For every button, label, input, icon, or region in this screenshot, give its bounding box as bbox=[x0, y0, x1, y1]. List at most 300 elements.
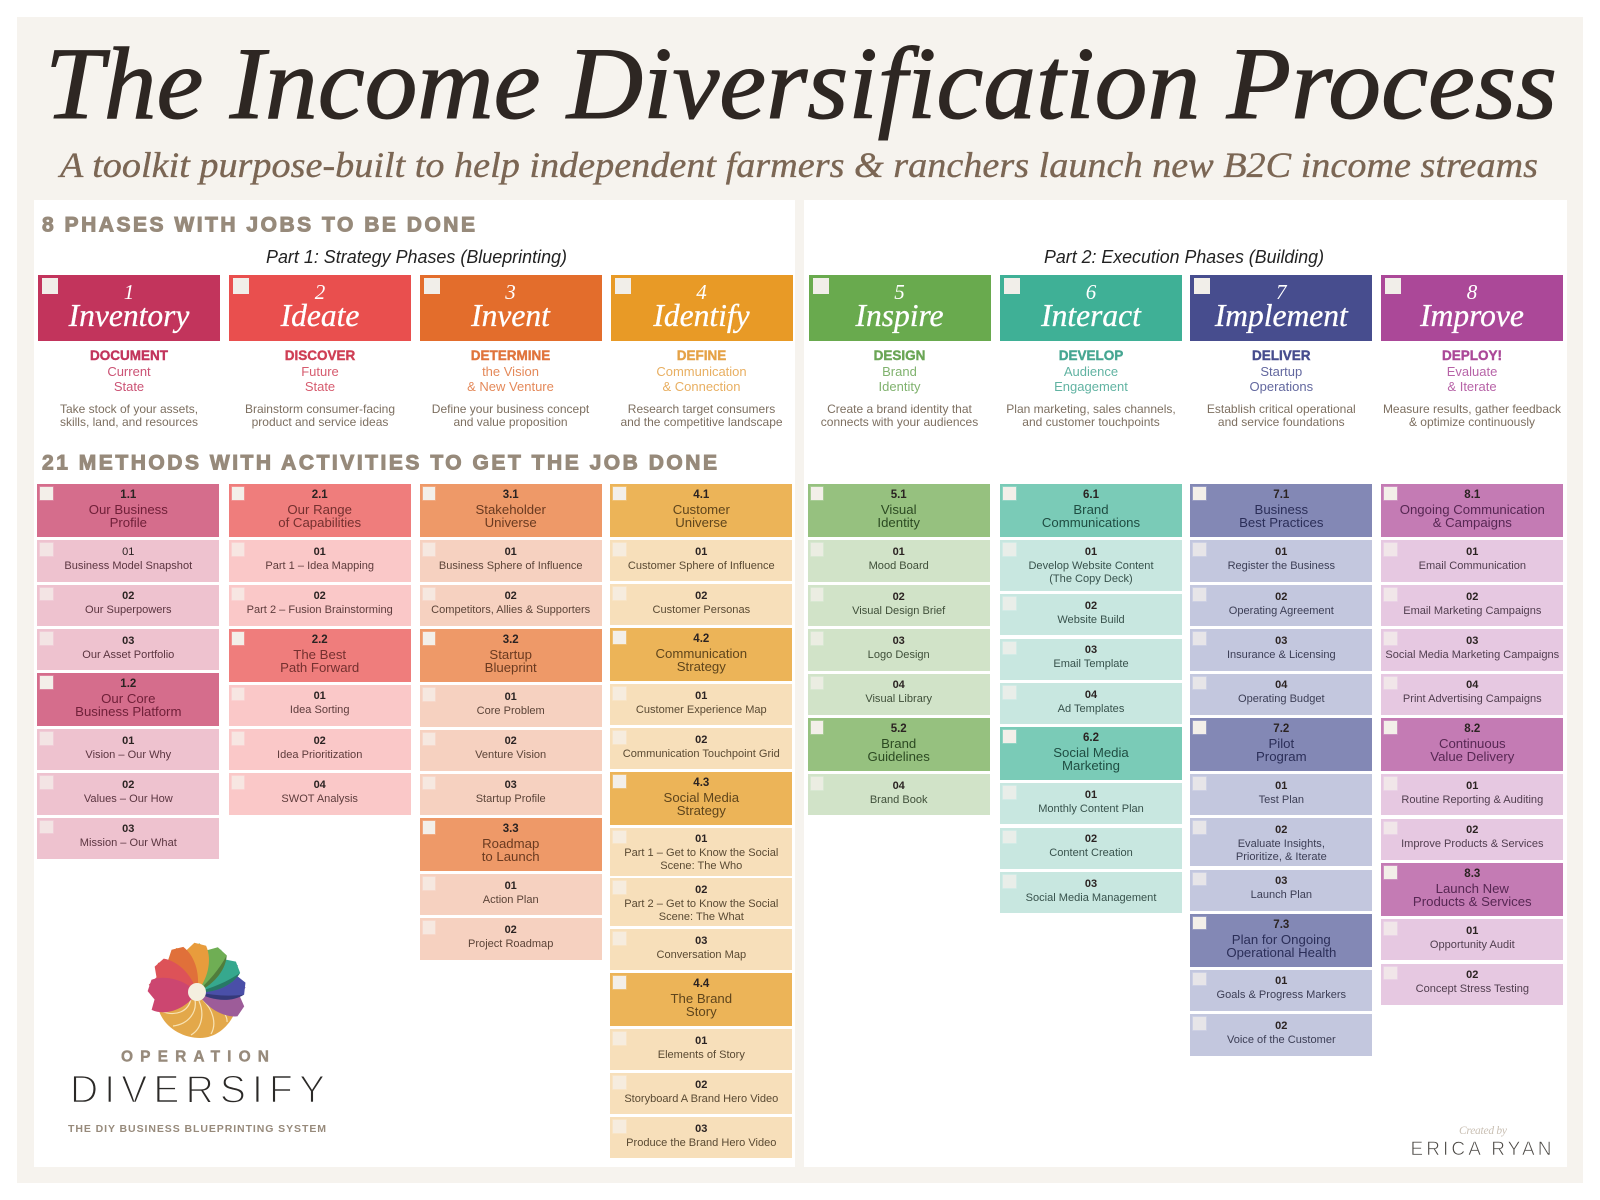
activity 4.2-02 bbox=[610, 728, 792, 769]
activity 4.2-02: Communication Touchpoint Grid bbox=[623, 748, 780, 760]
activity 7.2-01 bbox=[1190, 774, 1372, 815]
phase 5 job subtitle: Brand bbox=[882, 364, 917, 379]
activity 8.3-02: Concept Stress Testing bbox=[1416, 983, 1529, 995]
method 1.2: Business Platform bbox=[75, 704, 181, 719]
activity 7.1-01: Register the Business bbox=[1228, 560, 1335, 572]
activity 6.1-04: Ad Templates bbox=[1058, 702, 1124, 714]
activity 2.2-02: Idea Prioritization bbox=[277, 748, 362, 760]
activity 1.2-02 bbox=[37, 773, 219, 815]
activity 4.4-01: 01 bbox=[695, 1034, 707, 1046]
method 6.2: Marketing bbox=[1062, 758, 1120, 773]
activity 1.2-02: Values – Our How bbox=[84, 793, 173, 805]
activity 6.1-02 bbox=[1000, 594, 1182, 635]
phase 3 description bbox=[432, 402, 590, 428]
activity 5.1-02 bbox=[808, 585, 990, 626]
activity 2.1-02 bbox=[229, 585, 411, 626]
phase 2 description: product and service ideas bbox=[252, 414, 388, 428]
activity 7.1-04: 04 bbox=[1275, 679, 1287, 691]
phase 6 banner bbox=[1000, 275, 1182, 341]
subtitle: A toolkit purpose-built to help independent farmers & ranchers launch new B2C income streams bbox=[58, 145, 1538, 185]
phase 1 description bbox=[60, 402, 198, 428]
phase 7 banner: Implement bbox=[1215, 298, 1348, 333]
method 1.1 bbox=[37, 484, 219, 537]
method 3.3: 3.3 bbox=[503, 823, 519, 835]
activity 4.3-01: Scene: The Who bbox=[660, 860, 742, 872]
method 2.1 bbox=[229, 484, 411, 537]
activity 8.2-01 bbox=[1381, 774, 1563, 815]
colour petals bbox=[145, 940, 249, 1018]
phase 1 job: DOCUMENT bbox=[90, 348, 168, 363]
activity 3.2-02 bbox=[420, 730, 602, 771]
methods column 6 bbox=[1000, 484, 1182, 913]
method 5.2: Brand bbox=[881, 736, 916, 751]
method 8.2: 8.2 bbox=[1464, 723, 1480, 735]
phase 1 banner: Inventory bbox=[69, 298, 189, 333]
activity 1.2-03: 03 bbox=[122, 823, 134, 835]
method 5.2: 5.2 bbox=[891, 723, 907, 735]
activity 7.2-02: Evaluate Insights, bbox=[1238, 838, 1325, 850]
activity 4.1-01 bbox=[610, 540, 792, 581]
method 2.1: of Capabilities bbox=[278, 515, 361, 530]
method 7.2: 7.2 bbox=[1273, 723, 1289, 735]
activity 1.2-03: Mission – Our What bbox=[80, 837, 177, 849]
method 3.2: 3.2 bbox=[503, 634, 519, 646]
credit: Erica Ryan: ERICA RYAN bbox=[1410, 1139, 1552, 1160]
phase 1 banner bbox=[38, 275, 220, 341]
phase 6 job subtitle: Audience bbox=[1064, 364, 1118, 379]
activity 7.3-02 bbox=[1190, 1014, 1372, 1056]
activity 2.2-01: 01 bbox=[314, 690, 326, 702]
method 4.1: Universe bbox=[675, 515, 727, 530]
method 1.1: 1.1 bbox=[120, 489, 136, 501]
activity 3.3-02: Project Roadmap bbox=[468, 938, 553, 950]
method 2.1: Our Range bbox=[287, 502, 352, 517]
phase 2 description: Brainstorm consumer-facing bbox=[245, 402, 395, 416]
method 8.3 bbox=[1381, 863, 1563, 916]
logo mark bbox=[145, 940, 249, 1038]
activity 3.3-01: Action Plan bbox=[483, 894, 539, 906]
activity 8.1-01: 01 bbox=[1466, 546, 1478, 558]
activity 4.3-01: Part 1 – Get to Know the Social bbox=[624, 847, 778, 859]
activity 3.2-03: 03 bbox=[505, 779, 517, 791]
phase 5 bbox=[809, 275, 991, 428]
phase 4 banner: 4 bbox=[696, 280, 707, 304]
phase 6 job subtitle: Engagement bbox=[1054, 379, 1128, 394]
method 3.1: 3.1 bbox=[503, 489, 519, 501]
activity 4.3-01: 01 bbox=[695, 833, 707, 845]
methods column 7 bbox=[1190, 484, 1372, 1056]
method 2.2 bbox=[229, 629, 411, 682]
activity 8.1-04 bbox=[1381, 674, 1563, 715]
method 8.3: 8.3 bbox=[1464, 868, 1480, 880]
heading: 21 methods: 21 METHODS WITH ACTIVITIES TO GET THE JOB DONE bbox=[42, 452, 717, 474]
activity 4.4-03: 03 bbox=[695, 1122, 707, 1134]
method 4.3: Strategy bbox=[677, 803, 726, 818]
method 6.2: Social Media bbox=[1053, 745, 1129, 760]
activity 5.2-04: 04 bbox=[893, 780, 905, 792]
phase 1 job subtitle: Current bbox=[107, 364, 151, 379]
activity 4.3-03: 03 bbox=[695, 934, 707, 946]
activity 4.4-02: Storyboard A Brand Hero Video bbox=[624, 1092, 778, 1104]
method 5.1: Identity bbox=[877, 515, 920, 530]
phase 7 bbox=[1190, 275, 1372, 428]
method 8.3: Launch New bbox=[1436, 881, 1509, 896]
activity 8.2-01: 01 bbox=[1466, 780, 1478, 792]
activity 8.1-02: Email Marketing Campaigns bbox=[1403, 604, 1541, 616]
phase 1 banner: 1 bbox=[124, 280, 134, 304]
activity 4.3-02: Scene: The What bbox=[659, 911, 744, 923]
activity 7.1-01: 01 bbox=[1275, 546, 1287, 558]
phase 1 job subtitle bbox=[107, 364, 151, 394]
activity 1.1-03: 03 bbox=[122, 634, 134, 646]
method 3.1: Stakeholder bbox=[475, 502, 546, 517]
phase 5 job: DESIGN bbox=[874, 348, 925, 363]
method 7.1: Best Practices bbox=[1239, 515, 1323, 530]
activity 4.1-01: Customer Sphere of Influence bbox=[628, 560, 775, 572]
method 5.1: Visual bbox=[881, 502, 917, 517]
activity 4.1-02: Customer Personas bbox=[652, 604, 750, 616]
phase 8 job subtitle: Evaluate bbox=[1447, 364, 1497, 379]
activity 8.2-01: Routine Reporting & Auditing bbox=[1401, 794, 1543, 806]
method 4.4: The Brand bbox=[670, 991, 732, 1006]
method 8.1 bbox=[1381, 484, 1563, 537]
activity 1.2-03 bbox=[37, 818, 219, 859]
phase 3 bbox=[420, 275, 602, 428]
phase 4 job subtitle bbox=[656, 364, 747, 394]
phase 2 job subtitle bbox=[301, 364, 339, 394]
method 4.4: Story bbox=[686, 1004, 717, 1019]
activity 2.2-04: SWOT Analysis bbox=[281, 793, 358, 805]
phase 8 description bbox=[1383, 402, 1561, 428]
panel: part 2 background bbox=[804, 200, 1567, 1167]
method 4.2: Strategy bbox=[677, 659, 726, 674]
phase 7 description bbox=[1207, 402, 1356, 428]
activity 8.2-02: 02 bbox=[1466, 824, 1478, 836]
phase 7 description: and service foundations bbox=[1218, 414, 1345, 428]
phase 4 job subtitle: & Connection bbox=[662, 379, 741, 394]
phase 8 job: DEPLOY! bbox=[1442, 348, 1502, 363]
activity 7.1-03: 03 bbox=[1275, 635, 1287, 647]
methods column 8 bbox=[1381, 484, 1563, 1005]
activity 6.1-04 bbox=[1000, 683, 1182, 724]
activity 7.1-04: Operating Budget bbox=[1238, 693, 1325, 705]
phase 8 job subtitle bbox=[1447, 364, 1497, 394]
phase 5 job subtitle bbox=[879, 364, 920, 394]
phase 5 banner: Inspire bbox=[855, 298, 944, 333]
method 2.1: 2.1 bbox=[312, 489, 328, 501]
method 6.2 bbox=[1000, 727, 1182, 780]
method 8.1: 8.1 bbox=[1464, 489, 1480, 501]
method 7.2: Pilot bbox=[1268, 736, 1294, 751]
activity 7.1-02 bbox=[1190, 585, 1372, 626]
method 4.4: 4.4 bbox=[693, 978, 709, 990]
phase 7 description: Establish critical operational bbox=[1207, 402, 1356, 416]
activity 7.1-02: 02 bbox=[1275, 590, 1287, 602]
panel: part 1 background bbox=[34, 200, 795, 1167]
activity 8.1-04: 04 bbox=[1466, 679, 1478, 691]
activity 6.1-01 bbox=[1000, 540, 1182, 591]
phase 6 description bbox=[1006, 402, 1176, 428]
method 3.2: Startup bbox=[489, 647, 532, 662]
activity 3.3-02 bbox=[420, 918, 602, 960]
phase 6 job: DEVELOP bbox=[1059, 348, 1123, 363]
phase 6 bbox=[1000, 275, 1182, 428]
activity 6.1-01: (The Copy Deck) bbox=[1049, 573, 1133, 585]
activity 3.1-02: Competitors, Allies & Supporters bbox=[431, 604, 590, 616]
activity 6.2-01: Monthly Content Plan bbox=[1038, 802, 1144, 814]
phase 8 banner: Improve bbox=[1420, 298, 1524, 333]
activity 4.3-01 bbox=[610, 828, 792, 876]
activity 4.4-01 bbox=[610, 1029, 792, 1070]
activity 3.2-01: 01 bbox=[505, 691, 517, 703]
activity 6.1-02: Website Build bbox=[1057, 614, 1125, 626]
phase 6 banner: Interact bbox=[1041, 298, 1141, 333]
method 4.2 bbox=[610, 628, 792, 681]
phase 5 description: connects with your audiences bbox=[821, 414, 978, 428]
method 5.2: Guidelines bbox=[868, 749, 930, 764]
method 7.1: Business bbox=[1255, 502, 1308, 517]
activity 6.1-02: 02 bbox=[1085, 600, 1097, 612]
method 7.3 bbox=[1190, 914, 1372, 967]
method 1.1: Profile bbox=[110, 515, 147, 530]
activity 2.1-01: 01 bbox=[314, 546, 326, 558]
activity 7.2-02: Prioritize, & Iterate bbox=[1236, 851, 1327, 863]
logo text: operation: OPERATION bbox=[121, 1048, 269, 1066]
phase 4 banner: Identify bbox=[653, 298, 750, 333]
method 4.2: 4.2 bbox=[693, 633, 709, 645]
activity 1.2-02: 02 bbox=[122, 779, 134, 791]
activity 7.2-03: Launch Plan bbox=[1251, 889, 1312, 901]
activity 5.1-04 bbox=[808, 674, 990, 715]
phase 3 banner: Invent bbox=[471, 298, 550, 333]
method 4.1 bbox=[610, 484, 792, 537]
phase 2 description bbox=[245, 402, 395, 428]
activity 7.3-02: Voice of the Customer bbox=[1227, 1034, 1336, 1046]
activity 5.1-01: Mood Board bbox=[869, 560, 929, 572]
activity 4.1-02: 02 bbox=[695, 590, 707, 602]
activity 5.1-01 bbox=[808, 540, 990, 582]
phase 4 description: Research target consumers bbox=[628, 402, 775, 416]
method 5.2 bbox=[808, 718, 990, 771]
activity 8.1-01: Email Communication bbox=[1419, 560, 1526, 572]
activity 6.2-02 bbox=[1000, 828, 1182, 869]
method 6.1: Brand bbox=[1073, 502, 1109, 517]
activity 7.2-01: 01 bbox=[1275, 780, 1287, 792]
activity 7.3-02: 02 bbox=[1275, 1020, 1287, 1032]
activity 4.2-01 bbox=[610, 684, 792, 725]
phase 2 banner: Ideate bbox=[281, 298, 359, 333]
method 8.2: Value Delivery bbox=[1430, 749, 1514, 764]
phase 4 job: DEFINE bbox=[677, 348, 726, 363]
activity 5.2-04 bbox=[808, 774, 990, 815]
activity 8.1-03 bbox=[1381, 629, 1563, 671]
activity 4.3-02 bbox=[610, 878, 792, 926]
phase 4 banner bbox=[610, 275, 792, 341]
activity 1.2-01 bbox=[37, 729, 219, 770]
activity 7.1-03: Insurance & Licensing bbox=[1227, 649, 1336, 661]
activity 3.1-02 bbox=[420, 585, 602, 626]
phase 8 job subtitle: & Iterate bbox=[1447, 379, 1497, 394]
activity 6.1-03: 03 bbox=[1085, 644, 1097, 656]
activity 6.2-02: Content Creation bbox=[1049, 847, 1133, 859]
activity 7.2-01: Test Plan bbox=[1259, 794, 1304, 806]
method 4.3: 4.3 bbox=[693, 777, 709, 789]
logo: Operation Diversify bbox=[68, 942, 326, 1135]
activity 7.3-01 bbox=[1190, 970, 1372, 1011]
activity 4.3-02: Part 2 – Get to Know the Social bbox=[624, 898, 778, 910]
phase 3 job subtitle: the Vision bbox=[482, 364, 539, 379]
phase 4 bbox=[611, 275, 793, 428]
phase 3 job: DETERMINE bbox=[471, 348, 550, 363]
activity 2.1-01 bbox=[229, 540, 411, 582]
activity 7.2-03: 03 bbox=[1275, 875, 1287, 887]
phase 3 description: and value proposition bbox=[453, 414, 568, 428]
method 3.2 bbox=[420, 629, 602, 682]
heading: part 2: Part 2: Execution Phases (Building) bbox=[1044, 247, 1324, 267]
method 3.2: Blueprint bbox=[485, 660, 537, 675]
methods column 4 bbox=[610, 484, 792, 1158]
phase 5 description bbox=[821, 402, 978, 428]
method 4.4 bbox=[610, 973, 792, 1026]
phase 3 job subtitle: & New Venture bbox=[467, 379, 554, 394]
logo text: diversify: DIVERSIFY bbox=[70, 1068, 325, 1112]
activity 4.2-02: 02 bbox=[695, 734, 707, 746]
activity 1.2-01: Vision – Our Why bbox=[85, 748, 171, 760]
activity 4.4-01: Elements of Story bbox=[658, 1048, 745, 1060]
phase 2 job subtitle: Future bbox=[301, 364, 339, 379]
phase 5 job subtitle: Identity bbox=[879, 379, 920, 394]
activity 2.2-02 bbox=[229, 729, 411, 770]
method 3.3: to Launch bbox=[482, 849, 540, 864]
phase 7 banner bbox=[1190, 275, 1372, 341]
method 8.1: & Campaigns bbox=[1433, 515, 1512, 530]
method 8.2 bbox=[1381, 718, 1563, 771]
methods column 2 bbox=[229, 484, 411, 815]
method 7.3: 7.3 bbox=[1273, 919, 1289, 931]
title: The Income Diversification Process bbox=[45, 27, 1557, 141]
activity 8.3-01 bbox=[1381, 919, 1563, 960]
activity 3.3-01: 01 bbox=[505, 880, 517, 892]
activity 2.1-02: 02 bbox=[314, 590, 326, 602]
activity 4.1-02 bbox=[610, 584, 792, 625]
activity 6.2-01 bbox=[1000, 783, 1182, 824]
phase 1 job subtitle: State bbox=[114, 379, 144, 394]
activity 5.1-01: 01 bbox=[893, 546, 905, 558]
activity 1.1-03 bbox=[37, 629, 219, 670]
activity 4.4-02 bbox=[610, 1073, 792, 1114]
method 2.2: Path Forward bbox=[280, 660, 359, 675]
method 2.2: 2.2 bbox=[312, 634, 328, 646]
activity 4.2-01: 01 bbox=[695, 690, 707, 702]
activity 4.4-03 bbox=[610, 1117, 792, 1158]
method 4.3 bbox=[610, 772, 792, 825]
activity 6.2-03: 03 bbox=[1085, 878, 1097, 890]
heading: 8 phases: 8 PHASES WITH JOBS TO BE DONE bbox=[42, 214, 475, 236]
activity 7.2-02: 02 bbox=[1275, 824, 1287, 836]
phase 2 job: DISCOVER bbox=[285, 348, 355, 363]
method 3.1: Universe bbox=[485, 515, 537, 530]
phase 2 job subtitle: State bbox=[305, 379, 335, 394]
method 7.1: 7.1 bbox=[1273, 489, 1289, 501]
activity 2.2-01 bbox=[229, 685, 411, 726]
phase 3 job subtitle bbox=[467, 364, 554, 394]
methods column 5 bbox=[808, 484, 990, 815]
activity 2.2-01: Idea Sorting bbox=[290, 704, 349, 716]
activity 5.1-03: 03 bbox=[893, 635, 905, 647]
activity 7.3-01: Goals & Progress Markers bbox=[1217, 989, 1346, 1001]
activity 1.1-03: Our Asset Portfolio bbox=[82, 648, 174, 660]
activity 1.1-02: Our Superpowers bbox=[85, 604, 172, 616]
activity 7.1-03 bbox=[1190, 629, 1372, 671]
activity 7.1-02: Operating Agreement bbox=[1229, 604, 1334, 616]
activity 3.1-01: 01 bbox=[505, 546, 517, 558]
method 2.2: The Best bbox=[293, 647, 346, 662]
activity 2.1-02: Part 2 – Fusion Brainstorming bbox=[247, 604, 393, 616]
activity 8.1-01 bbox=[1381, 540, 1563, 582]
activity 5.1-03 bbox=[808, 629, 990, 671]
activity 8.3-02: 02 bbox=[1466, 969, 1478, 981]
phase 8 description: & optimize continuously bbox=[1409, 414, 1535, 428]
activity 7.2-03 bbox=[1190, 870, 1372, 911]
activity 6.1-04: 04 bbox=[1085, 688, 1097, 700]
phase 1 description: skills, land, and resources bbox=[60, 414, 198, 428]
phase 7 job subtitle bbox=[1250, 364, 1313, 394]
activity 1.1-01: Business Model Snapshot bbox=[64, 560, 192, 572]
activity 3.1-01: Business Sphere of Influence bbox=[439, 560, 583, 572]
phase 6 description: Plan marketing, sales channels, bbox=[1006, 402, 1176, 416]
activity 1.1-02 bbox=[37, 585, 219, 626]
activity 3.2-02: 02 bbox=[505, 735, 517, 747]
activity 3.2-02: Venture Vision bbox=[475, 749, 546, 761]
phase 2 bbox=[229, 275, 411, 428]
activity 3.1-02: 02 bbox=[505, 590, 517, 602]
activity 7.1-01 bbox=[1190, 540, 1372, 582]
method 7.2: Program bbox=[1256, 749, 1307, 764]
activity 5.1-02: 02 bbox=[893, 590, 905, 602]
method 5.1 bbox=[808, 484, 990, 537]
activity 6.2-02: 02 bbox=[1085, 833, 1097, 845]
activity 1.1-01: 01 bbox=[122, 546, 134, 558]
activity 5.1-04: 04 bbox=[893, 679, 905, 691]
phase 5 banner: 5 bbox=[894, 280, 905, 304]
phase 4 description: and the competitive landscape bbox=[620, 414, 783, 428]
phase 3 description: Define your business concept bbox=[432, 402, 589, 416]
credit: Erica Ryan bbox=[1410, 1125, 1552, 1160]
activity 8.2-02 bbox=[1381, 819, 1563, 860]
phase 5 description: Create a brand identity that bbox=[827, 402, 972, 416]
phase 2 banner bbox=[229, 275, 411, 341]
activity 2.2-04 bbox=[229, 773, 411, 815]
method 3.3 bbox=[420, 818, 602, 871]
activity 2.2-04: 04 bbox=[314, 779, 326, 791]
method 1.2: 1.2 bbox=[120, 678, 136, 690]
method 1.1: Our Business bbox=[89, 502, 168, 517]
phase 6 banner: 6 bbox=[1086, 280, 1096, 304]
activity 6.1-01: 01 bbox=[1085, 546, 1097, 558]
phase 1 bbox=[38, 275, 220, 428]
activity 3.2-01 bbox=[420, 685, 602, 727]
phase 1 description: Take stock of your assets, bbox=[60, 402, 198, 416]
method 1.2 bbox=[37, 673, 219, 726]
activity 6.2-03: Social Media Management bbox=[1026, 892, 1156, 904]
method 4.3: Social Media bbox=[664, 790, 739, 805]
method 6.2: 6.2 bbox=[1083, 732, 1099, 744]
activity 4.3-03 bbox=[610, 929, 792, 970]
activity 1.1-02: 02 bbox=[122, 590, 134, 602]
activity 3.2-03 bbox=[420, 774, 602, 815]
activity 5.1-02: Visual Design Brief bbox=[852, 604, 945, 616]
activity 7.2-02 bbox=[1190, 818, 1372, 866]
